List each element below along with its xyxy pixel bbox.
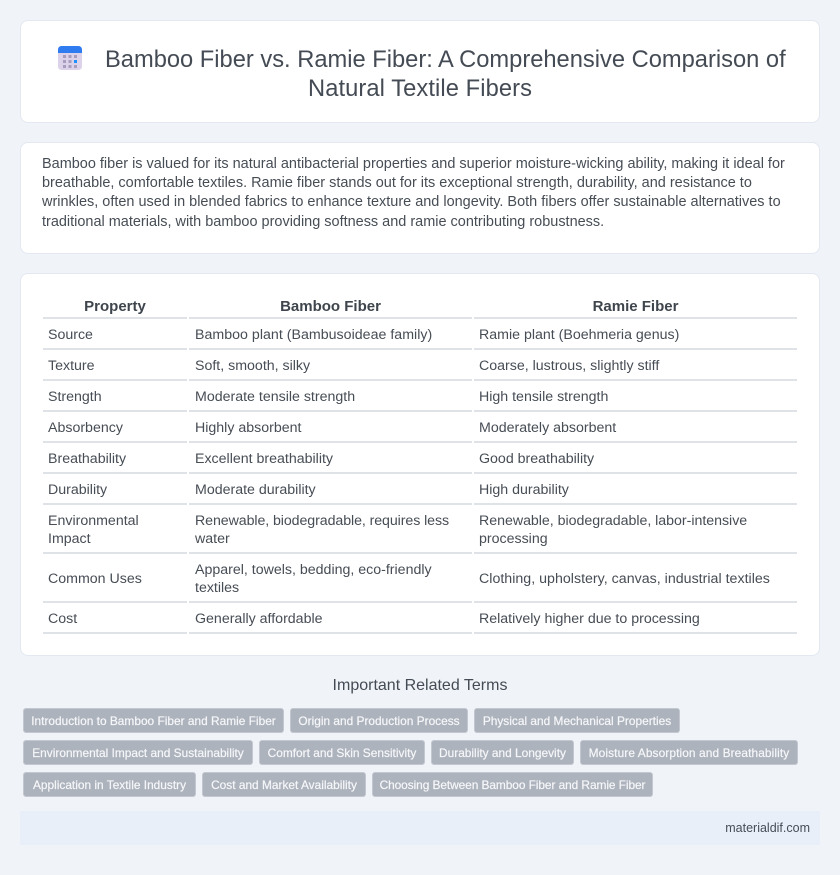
comparison table: Moderate tensile strength <box>195 389 355 405</box>
tag: Introduction to Bamboo Fiber and Ramie Fiber <box>31 714 276 728</box>
title <box>105 47 786 102</box>
comparison table: Moderate durability <box>195 482 316 498</box>
comparison table: Apparel, towels, bedding, eco-friendly <box>195 562 432 578</box>
header panel <box>20 20 820 123</box>
table header <box>84 298 678 315</box>
table header: Bamboo Fiber <box>280 298 381 315</box>
comparison table: water <box>195 531 230 547</box>
comparison table: Breathability <box>48 451 126 467</box>
footer bar <box>20 811 820 845</box>
tag <box>372 772 653 797</box>
comparison table: Good breathability <box>479 451 594 467</box>
comparison table: High durability <box>479 482 569 498</box>
comparison table: Renewable, biodegradable, labor-intensive <box>479 513 747 529</box>
comparison table: Strength <box>48 389 102 405</box>
comparison table: Durability <box>48 482 107 498</box>
tag <box>202 772 366 797</box>
table header: Ramie Fiber <box>593 298 678 315</box>
comparison table: textiles <box>195 580 239 596</box>
comparison table: Generally affordable <box>195 611 323 627</box>
comparison table: processing <box>479 531 548 547</box>
tag <box>23 708 284 733</box>
tag: Environmental Impact and Sustainability <box>32 746 244 760</box>
comparison table: Bamboo plant (Bambusoideae family) <box>195 327 432 343</box>
comparison table: Common Uses <box>48 571 142 587</box>
intro paragraph <box>42 156 785 230</box>
comparison table: Environmental <box>48 513 139 529</box>
comparison table: Excellent breathability <box>195 451 333 467</box>
comparison table: Renewable, biodegradable, requires less <box>195 513 449 529</box>
comparison table: Absorbency <box>48 420 123 436</box>
tag: Comfort and Skin Sensitivity <box>268 746 416 760</box>
tag: Physical and Mechanical Properties <box>483 714 671 728</box>
comparison table: Texture <box>48 358 95 374</box>
intro panel <box>20 142 820 254</box>
tag: Moisture Absorption and Breathability <box>589 746 789 760</box>
icon: calendar <box>58 46 82 70</box>
intro paragraph: traditional materials, with bamboo providing softness and ramie contributing robustness. <box>42 214 604 230</box>
comparison table: Highly absorbent <box>195 420 301 436</box>
comparison table: High tensile strength <box>479 389 608 405</box>
title: Natural Textile Fibers <box>308 76 532 102</box>
comparison table panel <box>20 273 820 656</box>
comparison table: Soft, smooth, silky <box>195 358 310 374</box>
footer source text: materialdif.com <box>725 821 810 835</box>
comparison table: Clothing, upholstery, canvas, industrial textiles <box>479 571 770 587</box>
table header: Property <box>84 298 146 315</box>
tag <box>290 708 468 733</box>
comparison table: Cost <box>48 611 77 627</box>
tag: Application in Textile Industry <box>33 778 186 792</box>
intro paragraph: breathable, comfortable textiles. Ramie fiber stands out for its exceptional strength, durability, and resistance to <box>42 175 752 191</box>
tag: Choosing Between Bamboo Fiber and Ramie Fiber <box>380 778 645 792</box>
tag <box>23 772 196 797</box>
comparison table: Source <box>48 327 93 343</box>
tag: Cost and Market Availability <box>211 778 357 792</box>
tag: Origin and Production Process <box>298 714 460 728</box>
related terms heading: Important Related Terms <box>333 677 507 694</box>
tag <box>474 708 680 733</box>
tag <box>259 740 425 765</box>
tag <box>580 740 798 765</box>
intro paragraph: Bamboo fiber is valued for its natural antibacterial properties and superior moisture-wicking ability, making it ideal for <box>42 156 785 172</box>
tag <box>431 740 574 765</box>
tag <box>23 740 253 765</box>
title: Bamboo Fiber vs. Ramie Fiber: A Comprehensive Comparison of <box>105 47 786 73</box>
intro paragraph: wrinkles, often used in blended fabrics to enhance texture and longevity. Both fibers offer sustainable alternatives to <box>42 194 781 210</box>
comparison table: Moderately absorbent <box>479 420 616 436</box>
comparison table: Relatively higher due to processing <box>479 611 700 627</box>
comparison table: Impact <box>48 531 91 547</box>
related terms tags <box>23 708 798 797</box>
comparison table: Coarse, lustrous, slightly stiff <box>479 358 659 374</box>
tag: Durability and Longevity <box>439 746 566 760</box>
comparison table: Ramie plant (Boehmeria genus) <box>479 327 679 343</box>
comparison table <box>43 298 797 634</box>
